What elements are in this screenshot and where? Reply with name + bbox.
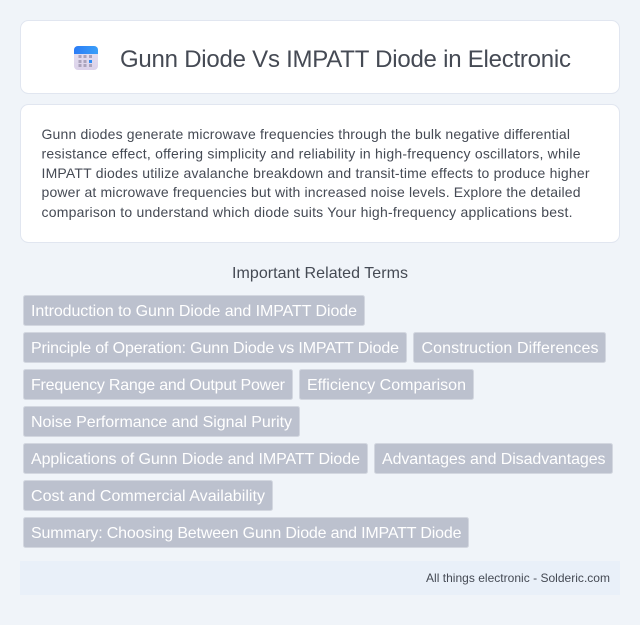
tag: principle of operation: Principle of Operation: Gunn Diode vs IMPATT Diode	[31, 340, 399, 357]
panel: related terms tags	[24, 296, 612, 548]
tag: frequency range	[24, 370, 292, 400]
summary text: IMPATT diodes utilize avalanche breakdown and transit-time effects to produce higher	[42, 165, 590, 181]
panel: title card	[20, 20, 620, 94]
tag: frequency range: Frequency Range and Output Power	[31, 377, 286, 394]
summary text: resistance effect, offering simplicity and reliability in high-frequency oscillators, while	[42, 146, 581, 162]
tag: applications: Applications of Gunn Diode and IMPATT Diode	[31, 451, 360, 468]
summary text: power at microwave frequencies but with increased noise levels. Explore the detailed	[42, 184, 580, 200]
summary text: Gunn diodes generate microwave frequencies through the bulk negative differential	[42, 126, 570, 142]
heading: important related terms: Important Related Terms	[232, 265, 408, 282]
footer	[20, 561, 620, 595]
icon: calendar	[74, 46, 98, 70]
tag: applications	[24, 444, 368, 474]
tag: noise performance: Noise Performance and Signal Purity	[31, 414, 292, 431]
tag: introduction	[24, 296, 364, 326]
tag: advantages and disadvantages	[374, 444, 612, 474]
summary text	[42, 126, 590, 220]
tag: efficiency comparison: Efficiency Comparison	[307, 377, 466, 394]
tag: efficiency comparison	[300, 370, 474, 400]
tag: summary	[24, 518, 468, 548]
title: Gunn Diode Vs IMPATT Diode in Electronic	[120, 46, 571, 73]
tag: summary: Summary: Choosing Between Gunn Diode and IMPATT Diode	[31, 525, 462, 542]
panel: summary card	[20, 104, 620, 242]
tag: advantages and disadvantages: Advantages and Disadvantages	[382, 451, 606, 468]
tag: cost and availability	[24, 480, 272, 510]
tag: noise performance	[24, 406, 300, 436]
tag: introduction: Introduction to Gunn Diode and IMPATT Diode	[31, 303, 357, 320]
summary text: comparison to understand which diode suits Your high-frequency applications best.	[42, 204, 572, 220]
tag: principle of operation	[24, 332, 406, 362]
tag: construction differences	[414, 332, 606, 362]
footer: All things electronic - Solderic.com	[426, 571, 610, 585]
tag: cost and availability: Cost and Commercial Availability	[31, 488, 265, 505]
tag: construction differences: Construction Differences	[422, 340, 598, 357]
